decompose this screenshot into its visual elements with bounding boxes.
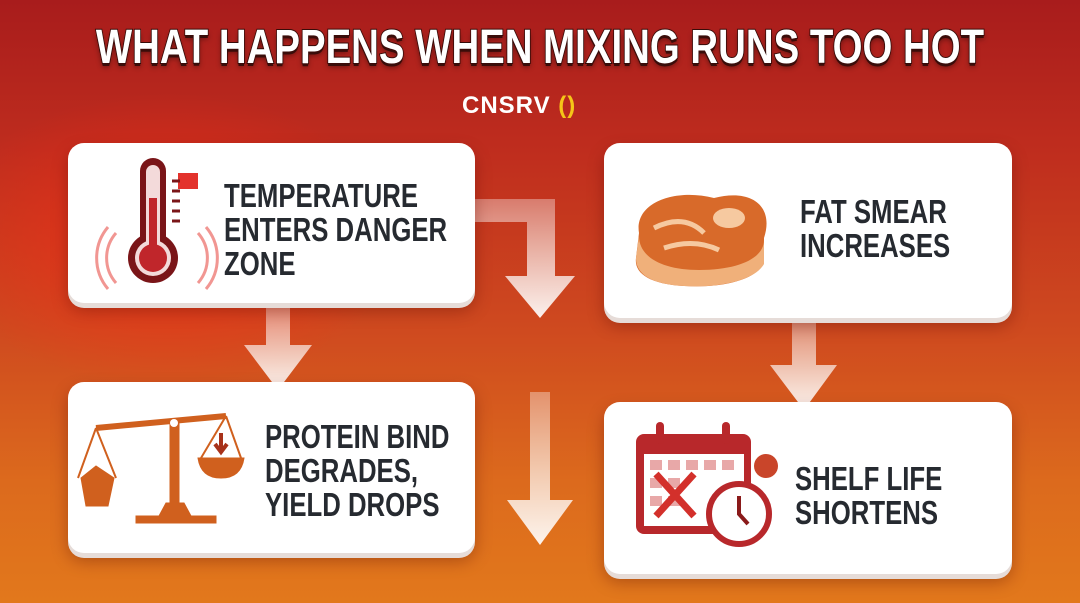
arrow: card1 to card2 side bbox=[475, 199, 575, 318]
logo: CNSRV () bbox=[462, 92, 576, 119]
text: ENTERS DANGER bbox=[224, 211, 447, 248]
text: YIELD DROPS bbox=[265, 486, 439, 523]
icon: thermometer bbox=[95, 158, 219, 290]
icon: scale bbox=[77, 413, 245, 524]
text: SHORTENS bbox=[795, 494, 938, 531]
icon: calendar with clock bbox=[636, 422, 778, 547]
icon: meat bbox=[636, 194, 767, 286]
text: SHELF LIFE bbox=[795, 460, 942, 497]
arrow: left long down bbox=[507, 392, 573, 545]
title: WHAT HAPPENS WHEN MIXING RUNS TOO HOT bbox=[96, 21, 984, 74]
panel: protein bind bbox=[68, 382, 475, 553]
arrow: card2 down bbox=[770, 318, 837, 410]
text: FAT SMEAR bbox=[800, 193, 947, 230]
text: PROTEIN BIND bbox=[265, 418, 449, 455]
text bbox=[265, 418, 449, 523]
text: ZONE bbox=[224, 245, 296, 282]
text: DEGRADES, bbox=[265, 452, 418, 489]
panel: shelf life bbox=[604, 402, 1012, 574]
text bbox=[224, 177, 447, 282]
text bbox=[800, 193, 950, 264]
text: INCREASES bbox=[800, 227, 950, 264]
text bbox=[795, 460, 942, 531]
arrow: card1 down bbox=[244, 303, 312, 390]
panel: fat smear bbox=[604, 143, 1012, 318]
text: TEMPERATURE bbox=[224, 177, 418, 214]
panel: temperature bbox=[68, 143, 475, 303]
